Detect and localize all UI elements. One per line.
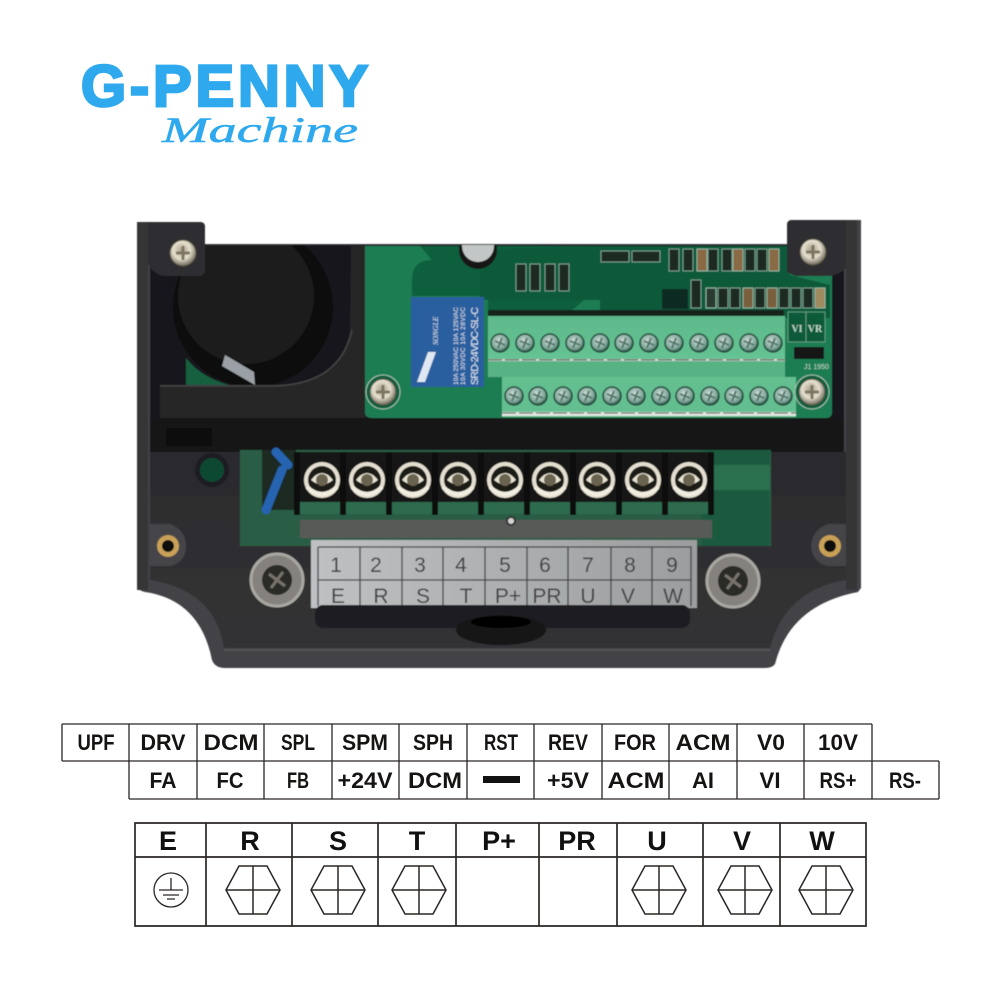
left and right wall shading [137, 220, 857, 590]
lower row labels: VI [760, 768, 780, 793]
upper row labels: 10V [818, 730, 858, 755]
plate letters: T [460, 585, 473, 608]
logo subtitle: Machine [160, 110, 358, 150]
lower row labels: RS+ [820, 768, 856, 793]
plate digits: 6 [539, 554, 551, 577]
lower row labels: RS- [889, 768, 921, 793]
shelf highlight [160, 330, 352, 386]
plate letters: S [416, 585, 430, 608]
upper row labels: SPH [413, 730, 453, 755]
photo: open drive housing [137, 220, 861, 668]
green board sliver under capacitor [186, 358, 290, 390]
icon: terminal hexagon V [718, 866, 772, 914]
upper row labels: ACM [676, 730, 730, 755]
plate letters: P+ [495, 585, 521, 608]
icon: ground symbol [154, 873, 188, 907]
slot under plate [315, 605, 690, 628]
power table headers: U [647, 826, 667, 856]
VI jumper labels [788, 312, 829, 371]
lower row labels [150, 768, 921, 793]
plate digits [330, 554, 678, 577]
upper row labels: SPL [281, 730, 315, 755]
housing body [137, 220, 861, 668]
plate letters: R [373, 585, 389, 608]
electrolytic capacitor [458, 246, 498, 270]
cross beam [150, 418, 844, 452]
logo: G-PENNY Machine [81, 54, 368, 150]
relay: 10A 250VAC 10A 125VAC [453, 307, 460, 385]
upper row labels: REV [548, 730, 588, 755]
top-left mount tab [148, 222, 205, 276]
VI jumper labels: J1 1950 [804, 364, 829, 371]
lower terminal block [502, 377, 796, 417]
round hole [195, 453, 229, 487]
lower row labels: AI [692, 768, 714, 793]
SMD parts upper [516, 249, 825, 309]
lower row labels: DCM [408, 768, 462, 793]
relay: SONGLE [431, 316, 440, 345]
relay: SRD-24VDC-SL-C [469, 307, 481, 385]
power table headers: S [329, 826, 347, 856]
blue wires [266, 452, 288, 510]
brass insert left [150, 524, 186, 566]
power table headers: PR [558, 826, 596, 856]
VI jumper labels: VR [808, 324, 823, 335]
power table headers: P+ [482, 826, 516, 856]
plate digits: 1 [330, 554, 342, 577]
power table headers: E [159, 826, 177, 856]
terminal label plate [311, 540, 697, 608]
lower row labels: FC [216, 768, 244, 793]
bottom rim highlight [224, 649, 770, 651]
upper row labels: RST [484, 730, 518, 755]
lower row labels: FB [287, 768, 309, 793]
plate digits: 8 [624, 554, 636, 577]
icon: terminal hexagon U [632, 866, 686, 914]
power table headers: V [733, 826, 751, 856]
power table headers [159, 826, 835, 856]
housing interior dark area [150, 245, 844, 452]
upper row labels: DCM [204, 730, 258, 755]
plate letters: U [580, 585, 596, 608]
plate letters: V [621, 585, 635, 608]
icon: terminal hexagon R [226, 866, 280, 914]
brass insert right [811, 524, 846, 566]
logo wordmark: G-PENNY [81, 54, 368, 119]
upper row labels: SPM [342, 730, 388, 755]
relay: 10A 30VDC 10A 28VDC [460, 307, 467, 385]
control PCB [365, 230, 832, 418]
dot [507, 517, 515, 525]
icon: terminal hexagon W [799, 866, 853, 914]
icon: terminal hexagon S [311, 866, 365, 914]
power terminal table [135, 823, 866, 926]
upper terminal block [488, 310, 785, 377]
mounting screw top left [170, 240, 196, 266]
lower row labels: ACM [608, 768, 664, 793]
lower compartment [150, 452, 846, 648]
plate digits: 7 [582, 554, 594, 577]
power table headers: T [409, 826, 426, 856]
plate letters: PR [532, 585, 562, 608]
icon: terminal hexagon T [392, 866, 446, 914]
plate letters: W [663, 585, 683, 608]
power board [240, 450, 771, 546]
plate letters: E [331, 585, 345, 608]
upper row labels [78, 730, 858, 755]
power table headers: R [240, 826, 260, 856]
capacitor [173, 246, 333, 386]
power terminal strip [294, 452, 714, 515]
upper row labels: FOR [614, 730, 656, 755]
relay [411, 297, 484, 387]
washer right [707, 555, 759, 607]
upper row labels: V0 [757, 730, 785, 755]
lower row labels: +24V [338, 768, 393, 793]
plate letters [331, 585, 683, 608]
plate digits: 4 [455, 554, 467, 577]
control terminal table [62, 724, 939, 799]
plate digits: 3 [414, 554, 426, 577]
VI jumper labels: VI [791, 324, 803, 335]
top-right mount tab [787, 220, 846, 276]
upper row labels: UPF [78, 730, 114, 755]
mounting screw top right [800, 239, 826, 265]
plate digits: 5 [499, 554, 511, 577]
knob [456, 615, 546, 645]
plate digits: 2 [370, 554, 382, 577]
power table headers: W [809, 826, 835, 856]
washer left [251, 554, 303, 606]
lower row labels: +5V [547, 768, 589, 793]
upper row labels: DRV [140, 730, 186, 755]
capacitor shelf [160, 246, 366, 420]
grey band [300, 520, 712, 538]
PCB screws [366, 375, 829, 409]
plate digits: 9 [666, 554, 678, 577]
lower row labels: FA [150, 768, 177, 793]
